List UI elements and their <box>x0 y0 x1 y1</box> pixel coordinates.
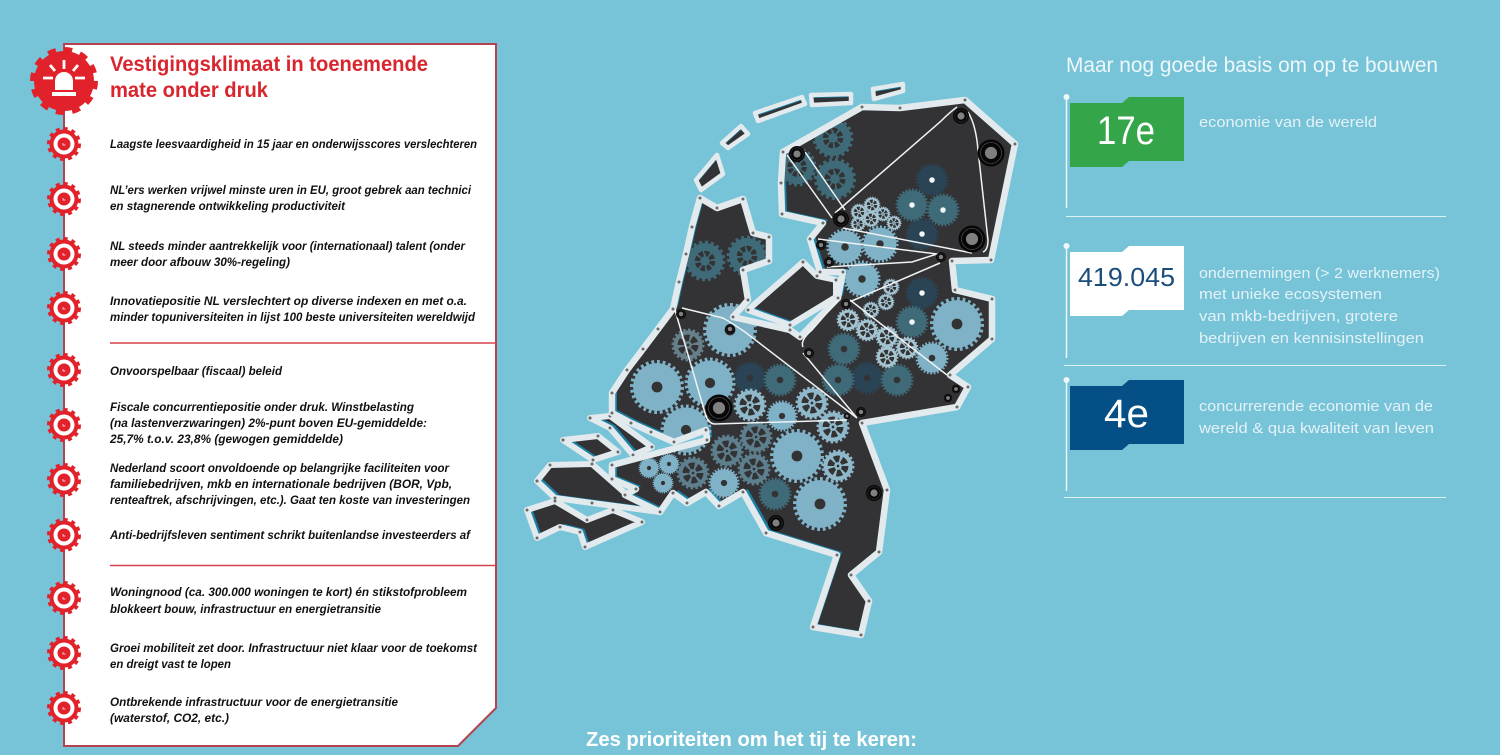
mainland <box>612 97 1020 635</box>
flag: 4e <box>1064 377 1184 491</box>
text block: fiscaal beleid: Anti-bedrijfsleven sentiment schrikt buitenlandse investeerders af <box>109 530 471 542</box>
bullet gears <box>48 128 80 724</box>
heading <box>110 53 428 102</box>
text block: woningen en infrastructuur <box>110 587 478 725</box>
text block: woningen en infrastructuur: en dreigt vast te lopen <box>110 659 231 671</box>
text block: onderwijs en talent: en stagnerende ontwikkeling productiviteit <box>110 201 346 213</box>
text block: fiscaal beleid: Onvoorspelbaar (fiscaal) beleid <box>110 366 283 378</box>
description: 419.045: met unieke ecosystemen <box>1199 286 1382 303</box>
flag: 419.045 <box>1064 243 1184 358</box>
text block: woningen en infrastructuur: Groei mobiliteit zet door. Infrastructuur niet klaar voor de toekomst <box>110 643 478 655</box>
section dividers <box>110 343 496 566</box>
text block: onderwijs en talent <box>110 139 477 324</box>
text block: woningen en infrastructuur: Woningnood (ca. 300.000 woningen te kort) én stikstofprobleem <box>110 587 467 599</box>
text block: fiscaal beleid <box>109 366 471 542</box>
Wadden islands <box>696 84 904 193</box>
text block: fiscaal beleid: Nederland scoort onvoldoende op belangrijke faciliteiten voor <box>110 463 450 475</box>
panel: goede basis <box>1064 54 1446 498</box>
panel background <box>64 44 496 746</box>
text block: onderwijs en talent: NL’ers werken vrijwel minste uren in EU, groot gebrek aan technici <box>110 185 472 197</box>
separators <box>1064 216 1446 498</box>
text block: onderwijs en talent: minder topuniversiteiten in lijst 100 beste universiteiten wereldwijd <box>110 312 476 324</box>
flag: 17e: 17e <box>1097 109 1155 153</box>
rivets <box>612 100 1015 635</box>
description: 419.045: van mkb-bedrijven, grotere <box>1199 308 1398 325</box>
description: 419.045: ondernemingen (> 2 werknemers) <box>1199 265 1440 282</box>
heading: Maar nog goede basis om op te bouwen <box>1066 54 1438 77</box>
heading: mate onder druk <box>110 79 268 102</box>
text block: onderwijs en talent: NL steeds minder aantrekkelijk voor (internationaal) talent (onder <box>110 241 466 253</box>
text block: fiscaal beleid: (na lastenverzwaringen) 2%-punt boven EU-gemiddelde: <box>110 418 427 430</box>
text block: fiscaal beleid: renteaftrek, afschrijvingen, etc.). Gaat ten koste van investeringen <box>110 495 470 507</box>
flag: 4e: 4e <box>1104 392 1149 436</box>
text block: woningen en infrastructuur: Ontbrekende infrastructuur voor de energietransitie <box>110 697 399 709</box>
text block: onderwijs en talent: Laagste leesvaardigheid in 15 jaar en onderwijsscores verslechteren <box>110 139 477 151</box>
text block: fiscaal beleid: Fiscale concurrentiepositie onder druk. Winstbelasting <box>110 402 414 414</box>
description: 419.045: bedrijven en kennisinstellingen <box>1199 330 1424 347</box>
panel: vestigingsklimaat onder druk <box>32 44 496 746</box>
pulleys <box>676 108 1004 531</box>
heading: Vestigingsklimaat in toenemende <box>110 53 428 76</box>
footer heading: Zes prioriteiten om het tij te keren: <box>586 729 917 751</box>
Flevoland and Zeeland islands <box>527 259 840 547</box>
description: 4e: wereld & qua kwaliteit van leven <box>1198 420 1434 437</box>
belts <box>675 107 988 424</box>
mainland outline <box>612 100 1015 635</box>
text block: fiscaal beleid: familiebedrijven, mkb en internationale bedrijven (BOR, Vpb, <box>110 479 452 491</box>
description: 4e <box>1198 398 1434 437</box>
text block: woningen en infrastructuur: blokkeert bouw, infrastructuur en energietransitie <box>110 604 382 616</box>
gears <box>632 119 982 529</box>
text block: onderwijs en talent: meer door afbouw 30%-regeling) <box>110 257 290 269</box>
map of the Netherlands with gears <box>527 84 1020 635</box>
text block: fiscaal beleid: 25,7% t.o.v. 23,8% (gewogen gemiddelde) <box>109 434 343 446</box>
description: 17e: economie van de wereld <box>1199 114 1377 131</box>
flag: 419.045: 419.045 <box>1078 262 1175 292</box>
text block: woningen en infrastructuur: (waterstof, CO2, etc.) <box>110 713 229 725</box>
text block: onderwijs en talent: Innovatiepositie NL verslechtert op diverse indexen en met o.a. <box>110 296 467 308</box>
description: 419.045 <box>1199 265 1440 347</box>
flag: 17e <box>1064 94 1184 208</box>
description: 4e: concurrerende economie van de <box>1199 398 1433 415</box>
icon: alarm gear <box>32 50 96 112</box>
